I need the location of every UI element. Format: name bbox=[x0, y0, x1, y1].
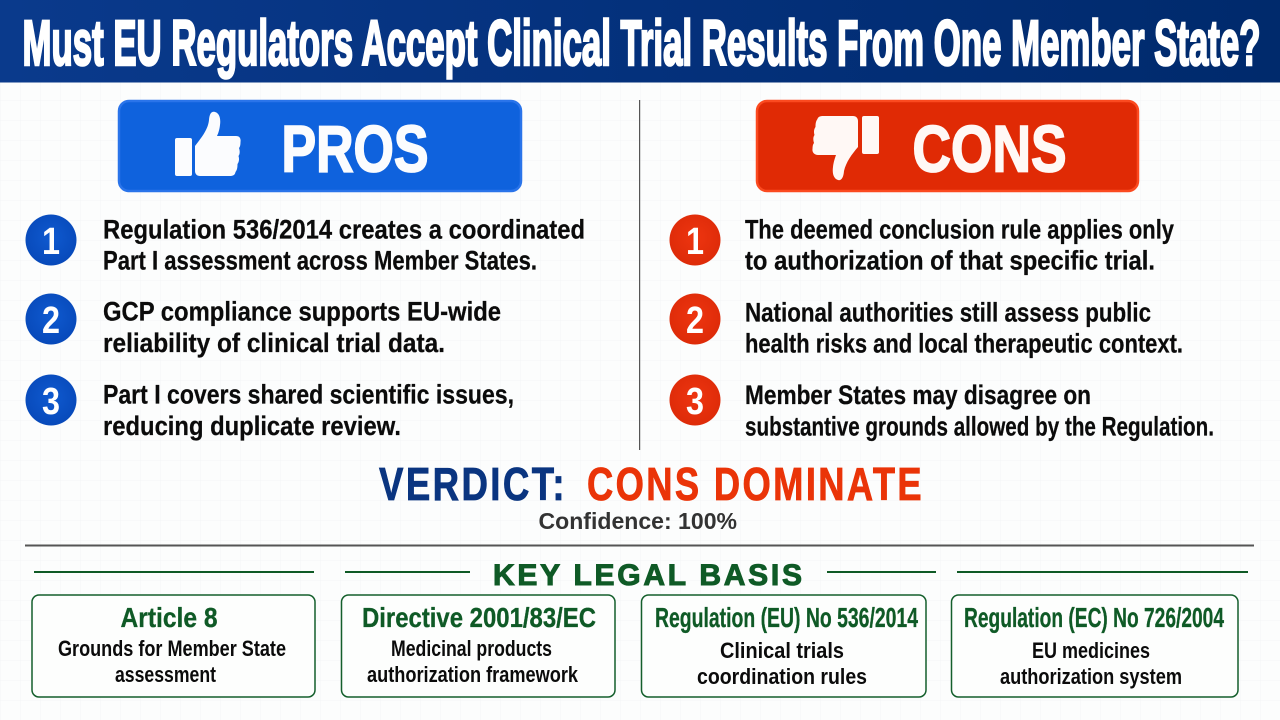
panel: regulation 536/2014 bbox=[642, 595, 926, 697]
panel: pros bbox=[26, 101, 585, 441]
panel: directive bbox=[342, 595, 615, 697]
con point 2: National authorities still assess public bbox=[745, 298, 1151, 328]
pros heading button bbox=[119, 101, 521, 191]
verdict: VERDICT: bbox=[379, 458, 567, 510]
con point 3 bbox=[670, 374, 1214, 442]
pros label: PROS bbox=[282, 112, 428, 186]
pro point 2 bbox=[26, 294, 501, 358]
panel: regulation 536/2014: coordination rules bbox=[697, 664, 867, 689]
icon: thumbs up bbox=[175, 112, 241, 176]
con point 1: 1 bbox=[686, 221, 704, 263]
panel: cons bbox=[670, 101, 1214, 442]
panel: regulation 536/2014: Clinical trials bbox=[720, 638, 844, 663]
confidence: Confidence: 100% bbox=[538, 508, 737, 534]
panel: article 8: Article 8 bbox=[120, 602, 218, 633]
panel: regulation 536/2014: Regulation (EU) No 536/2014 bbox=[655, 602, 918, 633]
pro point 1: 1 bbox=[42, 221, 60, 263]
con point 1: The deemed conclusion rule applies only bbox=[745, 214, 1174, 244]
verdict: CONS DOMINATE bbox=[587, 458, 924, 510]
con point 3: 3 bbox=[686, 381, 704, 423]
pro point 1: Regulation 536/2014 creates a coordinated bbox=[103, 214, 585, 244]
pro point 2: GCP compliance supports EU-wide bbox=[103, 296, 501, 326]
con point 2: health risks and local therapeutic context. bbox=[745, 328, 1183, 358]
pro point 3: reducing duplicate review. bbox=[103, 411, 401, 441]
panel: regulation 726/2004 bbox=[952, 595, 1238, 697]
verdict bbox=[379, 458, 924, 534]
pro point 1 bbox=[26, 214, 585, 276]
panel: regulation 726/2004: authorization system bbox=[1000, 664, 1182, 689]
pro point 2: reliability of clinical trial data. bbox=[103, 328, 445, 358]
pro point 2: 2 bbox=[42, 300, 60, 342]
pro point 3: 3 bbox=[42, 381, 60, 423]
panel: directive: Medicinal products bbox=[391, 636, 552, 661]
con point 1: to authorization of that specific trial. bbox=[745, 246, 1155, 276]
panel: directive: authorization framework bbox=[367, 662, 578, 687]
con point 2: 2 bbox=[686, 300, 704, 342]
pro point 1: Part I assessment across Member States. bbox=[103, 246, 537, 276]
panel: regulation 726/2004: EU medicines bbox=[1032, 638, 1150, 663]
cons label: CONS bbox=[912, 112, 1066, 186]
panel: article 8: Grounds for Member State bbox=[58, 636, 286, 661]
panel: directive: Directive 2001/83/EC bbox=[362, 602, 596, 633]
cons heading button bbox=[757, 101, 1138, 191]
con point 3: Member States may disagree on bbox=[745, 380, 1091, 410]
icon: thumbs down bbox=[812, 116, 879, 180]
con point 1 bbox=[670, 214, 1174, 276]
title banner bbox=[0, 0, 1280, 82]
pro point 3: Part I covers shared scientific issues, bbox=[103, 380, 514, 410]
con point 2 bbox=[670, 294, 1183, 358]
key legal basis heading: KEY LEGAL BASIS bbox=[493, 559, 802, 592]
panel: article 8 bbox=[32, 595, 315, 697]
pro point 3 bbox=[26, 374, 514, 441]
panel: article 8: assessment bbox=[115, 662, 216, 687]
